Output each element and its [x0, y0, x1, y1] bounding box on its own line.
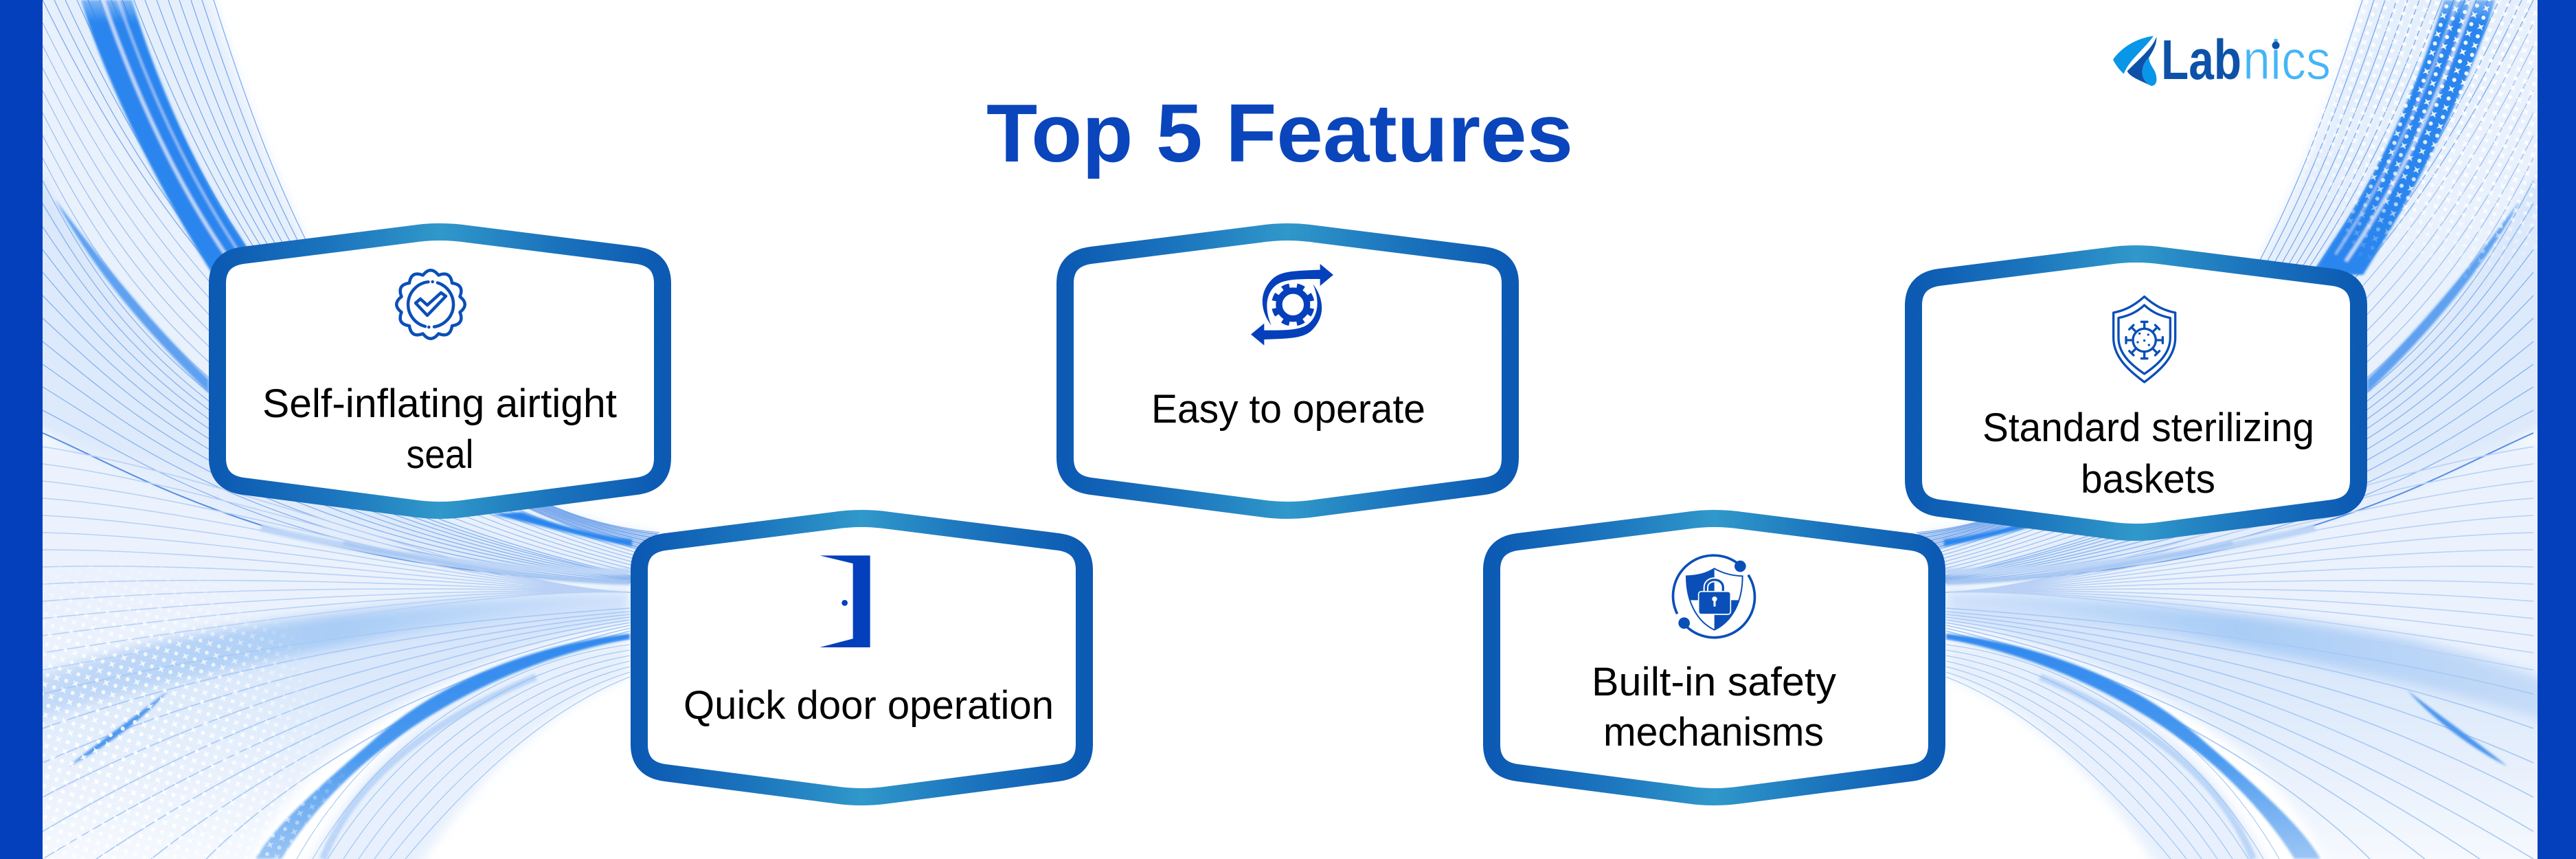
- logo: Lab: [2161, 29, 2241, 91]
- logo: [2113, 29, 2331, 91]
- wave washes: [27, 0, 659, 859]
- left side bar: [0, 0, 43, 859]
- text: standard sterilizing baskets: baskets: [2081, 457, 2215, 502]
- card: self-inflating airtight seal: [217, 232, 662, 510]
- bottom arc lines: [297, 639, 630, 859]
- top left edge lines: [43, 23, 639, 574]
- text: easy to operate: Easy to operate: [1151, 387, 1425, 432]
- lower horizontal fan: [43, 447, 632, 670]
- card: easy to operate: [1065, 232, 1510, 510]
- right wave lines: [1917, 0, 2549, 859]
- card: quick door operation: [639, 518, 1084, 797]
- top fan lines: [43, 0, 659, 550]
- text: self-inflating airtight seal: Self-inflating airtight: [262, 381, 617, 426]
- left wave lines: [27, 0, 659, 859]
- logo: nics: [2243, 29, 2331, 91]
- title: Top 5 Features: [986, 87, 1573, 179]
- bright strands: [55, 0, 632, 859]
- text: standard sterilizing baskets: Standard sterilizing: [1982, 405, 2314, 450]
- right side bar: [2538, 0, 2576, 859]
- text: quick door operation: Quick door operation: [683, 683, 1054, 728]
- middle fan lines: [43, 181, 639, 583]
- icon: gear with arrows: [1251, 264, 1333, 346]
- icon: shield lock: [1673, 555, 1754, 638]
- halftone bottom left: [43, 566, 344, 859]
- lower band lines: [43, 608, 630, 859]
- text: built-in safety mechanisms: mechanisms: [1603, 710, 1824, 755]
- card: built-in safety mechanisms: [1492, 518, 1937, 797]
- text: built-in safety mechanisms: Built-in safety: [1592, 660, 1836, 704]
- card: standard sterilizing baskets: [1914, 254, 2359, 532]
- icon: door: [820, 555, 870, 647]
- text: self-inflating airtight seal: seal: [407, 432, 474, 477]
- icon: virus shield: [2114, 297, 2176, 382]
- icon: badge check: [396, 270, 465, 339]
- halftone top right: [2303, 0, 2538, 280]
